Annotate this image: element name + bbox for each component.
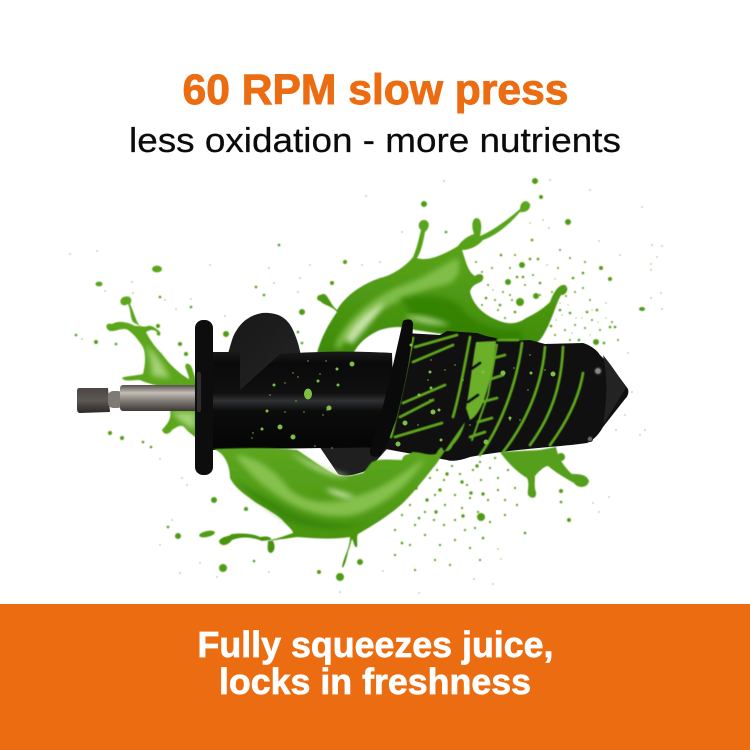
lower auger fin (315, 440, 395, 476)
footer text line 2: locks in freshness (219, 661, 531, 702)
second flange (370, 319, 413, 457)
flange disc (195, 320, 213, 475)
spray cloud lower (395, 450, 517, 570)
auger central body (212, 352, 395, 450)
screw tip highlights (587, 355, 626, 442)
subtitle: less oxidation - more nutrients (129, 122, 621, 160)
footer text line 1: Fully squeezes juice, (198, 624, 554, 665)
illustration: juicer auger with green juice splash (70, 180, 662, 593)
left splash (106, 296, 198, 440)
orange footer band (0, 604, 750, 750)
title: 60 RPM slow press (182, 66, 568, 114)
spray cloud upper (476, 250, 618, 345)
right lower splash (500, 447, 589, 498)
upper auger fin (213, 313, 301, 410)
shaft hex bit (77, 385, 198, 413)
screw tip cone (375, 331, 628, 461)
splash droplets (70, 180, 662, 593)
screw green ribs (391, 335, 583, 455)
upper splash swoosh (317, 201, 567, 354)
droplets on auger (252, 345, 553, 448)
lower splash swoosh (213, 422, 465, 568)
